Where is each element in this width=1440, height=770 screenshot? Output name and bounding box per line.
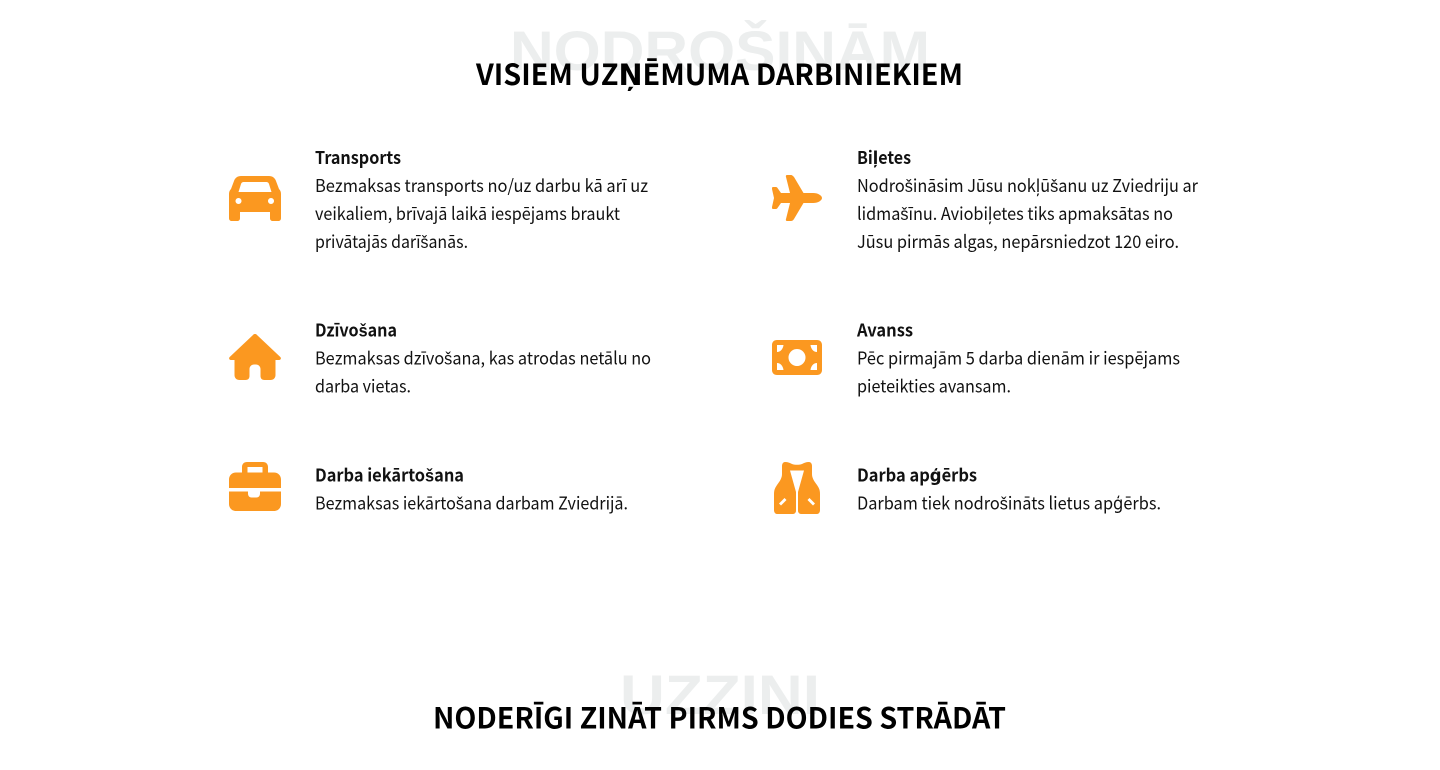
panel: Avanss bbox=[772, 318, 1180, 398]
text: Avanss: pieteikties avansam. bbox=[857, 374, 1011, 398]
heading: Noderīgi zināt pirms dodies strādāt: NODERĪGI ZINĀT PIRMS DODIES STRĀDĀT bbox=[433, 696, 1006, 738]
text: Biļetes: Jūsu pirmās algas, nepārsniedzot 120 eiro. bbox=[857, 229, 1179, 254]
icon: house bbox=[229, 334, 281, 380]
text: Darba apģērbs: Darba apģērbs bbox=[857, 462, 977, 488]
text: Darba iekārtošana: Bezmaksas iekārtošana darbam Zviedrijā. bbox=[315, 490, 628, 516]
text: Biļetes: Biļetes bbox=[857, 145, 911, 170]
icon: car bbox=[229, 176, 281, 221]
text: Dzīvošana: Dzīvošana bbox=[315, 318, 397, 342]
panel: Transports bbox=[229, 145, 648, 254]
icon: vest bbox=[774, 462, 820, 514]
panel: Dzīvošana bbox=[229, 318, 651, 398]
text: Avanss: Avanss bbox=[856, 318, 913, 342]
text: Transports: Transports bbox=[315, 145, 401, 170]
text: Transports: Bezmaksas transports no/uz darbu kā arī uz bbox=[315, 173, 648, 198]
text: Biļetes: Nodrošināsim Jūsu nokļūšanu uz Zviedriju ar bbox=[857, 173, 1198, 198]
text: Darba iekārtošana: Darba iekārtošana bbox=[315, 462, 464, 488]
text: Avanss bbox=[856, 318, 1180, 398]
panel: Darba iekārtošana bbox=[229, 462, 628, 516]
text: Darba apģērbs bbox=[857, 462, 1161, 516]
text: Darba apģērbs: Darbam tiek nodrošināts lietus apģērbs. bbox=[857, 490, 1161, 516]
text: Biļetes bbox=[857, 145, 1198, 254]
heading: Visiem uzņēmuma darbiniekiem: VISIEM UZŅĒMUMA DARBINIEKIEM bbox=[475, 52, 963, 94]
text: Dzīvošana bbox=[315, 318, 651, 398]
icon: airplane bbox=[772, 175, 822, 221]
text: Transports: privātajās darīšanās. bbox=[315, 229, 468, 254]
icon: briefcase bbox=[229, 462, 281, 511]
text: Darba iekārtošana bbox=[315, 462, 628, 516]
ghost heading: UZZINI: UZZINI bbox=[620, 663, 820, 726]
icon: banknote bbox=[772, 340, 822, 375]
text: Transports bbox=[315, 145, 648, 254]
text: Transports: veikaliem, brīvajā laikā iespējams braukt bbox=[315, 201, 620, 226]
panel: Biļetes bbox=[772, 145, 1198, 254]
text: Dzīvošana: darba vietas. bbox=[315, 374, 411, 398]
text: Biļetes: lidmašīnu. Aviobiļetes tiks apmaksātas no bbox=[857, 201, 1173, 226]
text: Avanss: Pēc pirmajām 5 darba dienām ir iespējams bbox=[857, 346, 1180, 370]
text: Dzīvošana: Bezmaksas dzīvošana, kas atrodas netālu no bbox=[315, 346, 651, 370]
panel: Darba apģērbs bbox=[774, 462, 1161, 516]
ghost heading: NODROŠINĀM: NODROŠINĀM bbox=[510, 19, 930, 82]
